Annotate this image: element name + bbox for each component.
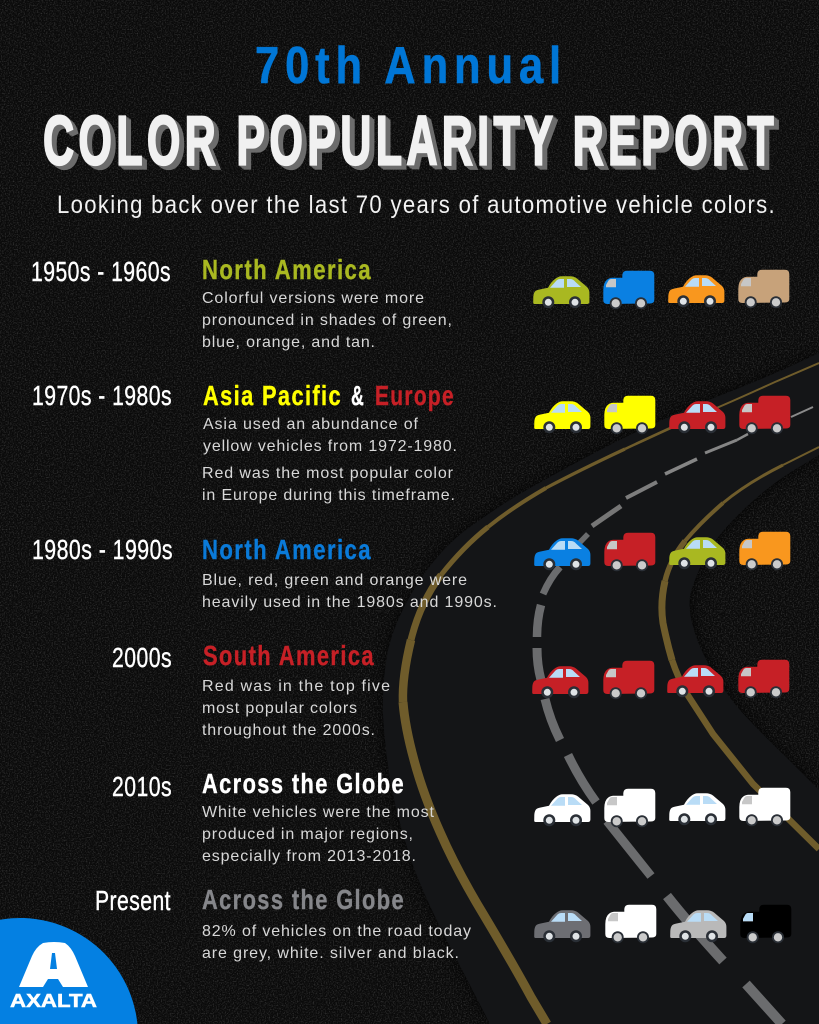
description: White vehicles were the most <box>202 804 435 821</box>
logo mark <box>19 942 88 987</box>
region heading: Asia Pacific <box>203 380 342 411</box>
description: especially from 2013-2018. <box>202 848 416 865</box>
logo badge <box>0 918 137 1024</box>
region heading: South America <box>203 640 375 671</box>
description: 82% of vehicles on the road today <box>202 923 471 940</box>
region heading: Europe <box>375 380 455 411</box>
description: Asia: Asia used an abundance of <box>203 416 419 433</box>
description: are grey, white. silver and black. <box>202 945 459 962</box>
outer road line <box>403 363 819 1024</box>
description: most popular colors <box>202 700 357 717</box>
date: Present <box>95 885 171 916</box>
road illustration <box>383 353 819 1024</box>
description: Red was in the top five <box>202 678 390 695</box>
centre dashes <box>537 407 813 1024</box>
vehicle icons <box>534 396 790 434</box>
description: Europe: Red was the most popular color <box>202 465 454 482</box>
description: blue, orange, and tan. <box>202 334 375 351</box>
header <box>43 37 778 219</box>
vehicle icons <box>534 532 790 571</box>
description: pronounced in shades of green, <box>202 312 452 329</box>
description <box>202 923 471 962</box>
description <box>202 290 452 351</box>
description: heavily used in the 1980s and 1990s. <box>202 594 497 611</box>
vehicle icons <box>534 905 791 943</box>
description: throughout the 2000s. <box>202 722 375 739</box>
description: Blue, red, green and orange were <box>202 572 467 589</box>
subtitle heading: 70th Annual: 70th Annual <box>255 37 567 95</box>
description: Europe <box>202 465 455 504</box>
description <box>202 572 497 611</box>
row: Present <box>95 884 791 962</box>
row: 2000s <box>112 640 789 739</box>
logo: Axalta <box>0 918 137 1024</box>
date: 2000s <box>112 642 172 673</box>
description: produced in major regions, <box>202 826 413 843</box>
row: 1950s - 1960s <box>31 254 789 351</box>
description: Europe: in Europe during this timeframe. <box>202 487 455 504</box>
region heading: & <box>351 380 365 411</box>
vehicle icons <box>534 788 790 827</box>
date: 1980s - 1990s <box>32 534 173 565</box>
vehicle icons <box>532 660 789 699</box>
region heading: Across the Globe <box>202 768 405 799</box>
row: 1970s - 1980s <box>32 380 790 504</box>
date: 1950s - 1960s <box>31 256 171 287</box>
description: Asia: yellow vehicles from 1972-1980. <box>203 438 457 455</box>
row: 1980s - 1990s <box>32 532 790 611</box>
date: 1970s - 1980s <box>32 380 172 411</box>
row: 2010s <box>112 768 790 865</box>
description: Asia <box>203 416 457 455</box>
inner road line <box>662 447 819 849</box>
vehicle icons <box>533 270 789 309</box>
region heading: Across the Globe <box>202 884 405 915</box>
region heading: North America <box>202 254 372 285</box>
date: 2010s <box>112 771 172 802</box>
description <box>202 804 435 865</box>
region heading: North America <box>202 534 372 565</box>
logo wordmark: AXALTA <box>10 991 97 1011</box>
description: Colorful versions were more <box>202 290 424 307</box>
description <box>202 678 390 739</box>
